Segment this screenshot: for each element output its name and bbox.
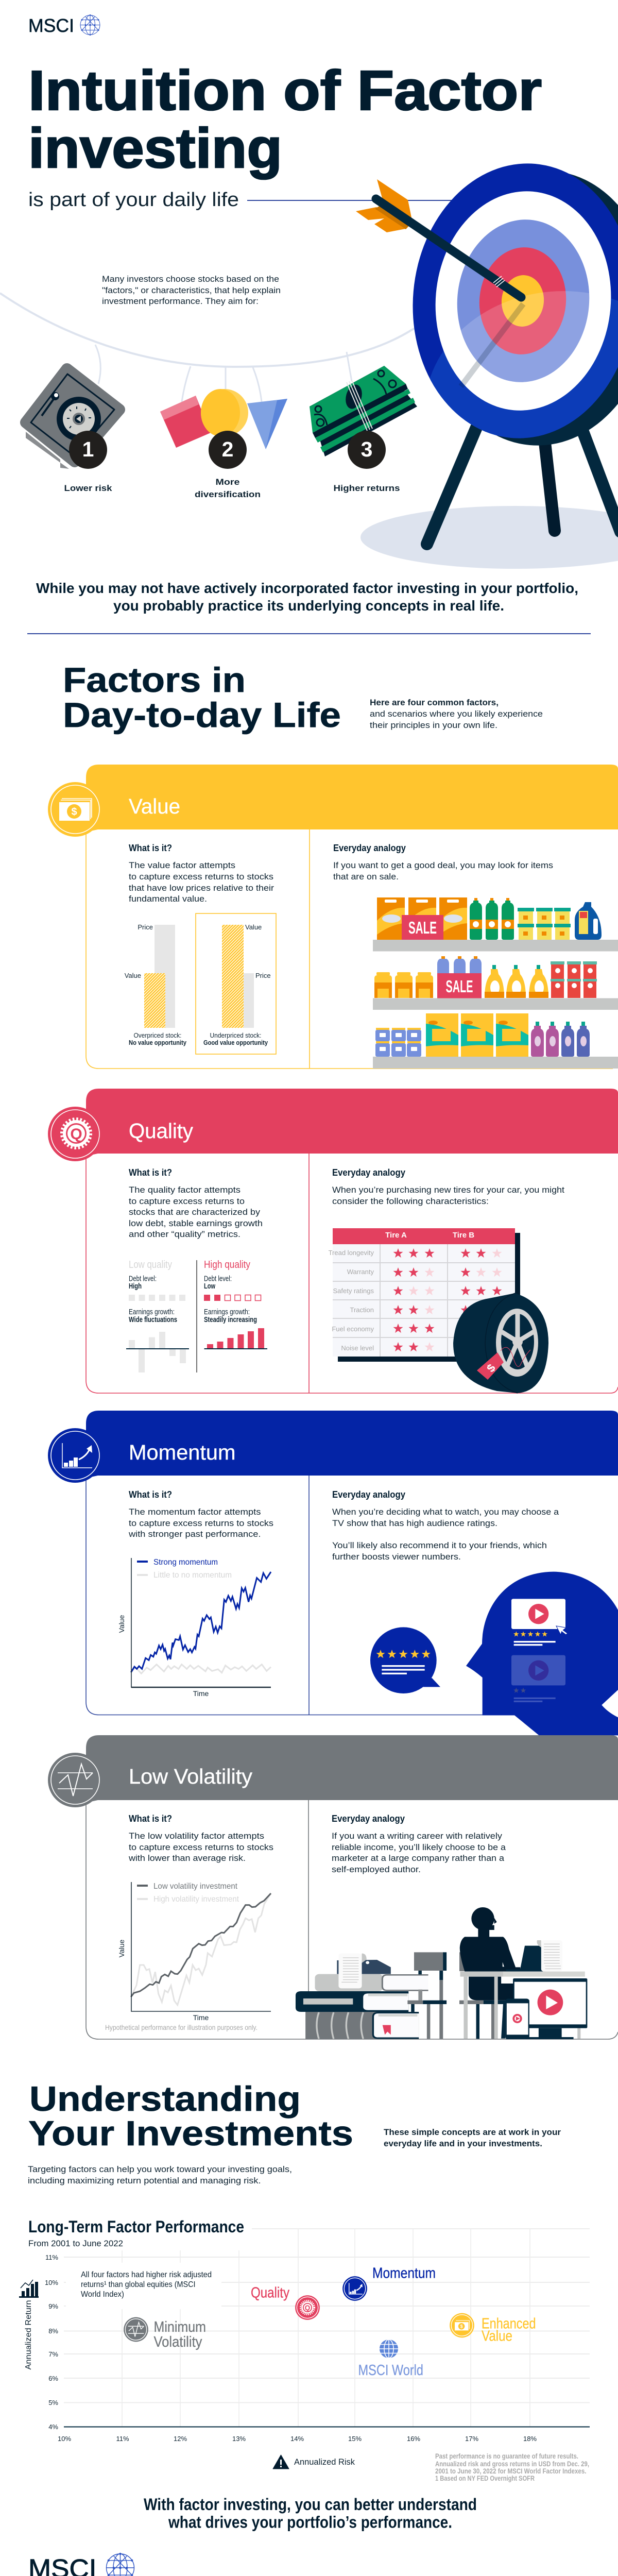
curved string — [0, 284, 507, 402]
momentum everyday analogy: You’ll likely also recommend it to your friends, which — [332, 1540, 547, 1550]
point: momentum: Momentum — [372, 2265, 436, 2281]
intro text — [102, 274, 281, 306]
y axis title: Annualized Return — [24, 2300, 33, 2370]
label: more diversification — [195, 477, 261, 499]
quality what is it — [129, 1167, 263, 1239]
value bar charts: Value — [125, 972, 141, 979]
understanding intro — [28, 2164, 292, 2185]
x axis labels — [58, 2435, 537, 2443]
table: tire comparison: Safety ratings — [333, 1287, 374, 1295]
point: MSCI World: MSCI World — [358, 2362, 423, 2379]
low volatility header — [86, 1735, 618, 1803]
heading: understanding your investments — [28, 2079, 353, 2153]
footnote: 1 Based on NY FED Overnight SOFR — [435, 2474, 535, 2482]
low volatility title: Low Volatility — [129, 1765, 253, 1788]
line chart: low volatility: Value — [117, 1939, 126, 1957]
chart note: All four factors had higher risk adjusted — [81, 2270, 212, 2279]
value what is it — [129, 843, 274, 904]
panel: momentum — [48, 1411, 618, 1735]
momentum what is it: to capture excess returns to stocks — [129, 1518, 273, 1528]
icon: target on tripod — [360, 154, 618, 569]
badge: number 1: 1 — [82, 437, 94, 461]
low volatility what is it: The low volatility factor attempts — [129, 1831, 264, 1841]
value what is it: that have low prices relative to their — [129, 883, 274, 893]
closing statement: With factor investing, you can better understand — [144, 2495, 477, 2514]
table: tire comparison: Tread longevity — [329, 1249, 374, 1257]
momentum everyday analogy: TV show that has high audience ratings. — [332, 1518, 497, 1528]
table: tire comparison: Traction — [350, 1306, 374, 1314]
low volatility icon — [48, 1753, 102, 1807]
low volatility what is it: with lower than average risk. — [128, 1853, 246, 1863]
value bar charts: Value — [245, 923, 262, 931]
point: enhanced value — [450, 2313, 536, 2344]
quality comparison: Debt level: — [129, 1275, 157, 1283]
quality what is it: and other “quality” metrics. — [129, 1229, 241, 1239]
x axis labels: 10% — [58, 2435, 71, 2443]
divider — [27, 633, 591, 634]
statement: While you may not have actively incorporated factor investing in your portfolio, — [36, 580, 578, 596]
low volatility everyday analogy: marketer at a large company rather than a — [332, 1853, 505, 1863]
factors intro text: their principles in your own life. — [370, 720, 497, 730]
y axis labels: 5% — [48, 2399, 58, 2406]
low volatility everyday analogy: Everyday analogy — [332, 1814, 405, 1824]
closing statement — [144, 2495, 477, 2532]
table: tire comparison: Tire B — [453, 1231, 474, 1240]
value everyday analogy — [333, 843, 553, 882]
value everyday analogy: Everyday analogy — [333, 843, 406, 853]
table: tire comparison: Noise level — [341, 1344, 374, 1352]
quality comparison: Earnings growth: — [129, 1308, 175, 1316]
value bar charts: Overpriced stock: — [134, 1031, 181, 1039]
x axis labels: 18% — [523, 2435, 537, 2443]
icon: banknotes — [310, 366, 417, 456]
logo: MSCI footer — [28, 2553, 134, 2576]
heading: understanding your investments: Understanding — [29, 2079, 301, 2119]
x axis labels: 13% — [232, 2435, 246, 2443]
logo: MSCI — [28, 14, 100, 36]
value title: Value — [129, 794, 180, 818]
quality what is it: What is it? — [129, 1167, 172, 1178]
value icon: $ — [71, 806, 77, 818]
quality header — [86, 1089, 618, 1156]
y axis labels — [45, 2253, 58, 2431]
momentum title: Momentum — [129, 1440, 236, 1464]
x axis labels: 17% — [465, 2435, 478, 2443]
label: lower risk: Lower risk — [64, 483, 112, 493]
value bar charts — [125, 913, 276, 1054]
y axis labels: 4% — [48, 2423, 58, 2431]
low volatility everyday analogy: reliable income, you’ll likely choose to be a — [332, 1842, 506, 1852]
quality comparison — [126, 1259, 267, 1372]
icon: safe — [26, 369, 119, 469]
quality comparison: Wide fluctuations — [129, 1315, 177, 1324]
closing statement: what drives your portfolio’s performance. — [168, 2513, 452, 2532]
title — [28, 59, 542, 180]
understanding side note — [384, 2127, 561, 2148]
y axis labels: 11% — [45, 2253, 58, 2261]
point: MSCI World — [358, 2340, 423, 2379]
y axis labels: 9% — [48, 2302, 58, 2310]
point: minimum volatility: Volatility — [153, 2334, 202, 2350]
quality what is it: stocks that are characterized by — [129, 1207, 261, 1217]
momentum what is it: with stronger past performance. — [128, 1529, 261, 1539]
badge: number 2: 2 — [222, 437, 233, 461]
line chart: momentum: Time — [193, 1689, 209, 1698]
line chart: low volatility: High volatility investment — [153, 1895, 239, 1904]
table: tire comparison: Warranty — [347, 1268, 374, 1276]
illustration: speech bubble — [370, 1627, 440, 1693]
footnote: 2001 to June 30, 2022 for MSCI World Factor Indexes. — [435, 2467, 586, 2475]
line chart: momentum: Strong momentum — [153, 1558, 218, 1567]
illustration: grocery shelves — [373, 897, 618, 1069]
icon: diversification shapes — [160, 389, 287, 449]
chart heading: From 2001 to June 2022 — [28, 2239, 123, 2248]
quality comparison: Earnings growth: — [204, 1308, 250, 1316]
point: momentum — [342, 2265, 436, 2301]
statement: you probably practice its underlying concepts in real life. — [113, 598, 504, 614]
x axis labels: 11% — [116, 2435, 129, 2443]
value everyday analogy: If you want to get a good deal, you may look for items — [333, 860, 553, 870]
quality everyday analogy: When you’re purchasing new tires for your car, you might — [332, 1185, 564, 1195]
line chart: momentum: Little to no momentum — [153, 1571, 232, 1580]
momentum everyday analogy: When you’re deciding what to watch, you may choose a — [332, 1507, 559, 1517]
value bar charts: Good value opportunity — [203, 1039, 268, 1046]
factors intro text — [370, 698, 543, 730]
point: enhanced value: Enhanced — [482, 2315, 536, 2332]
point: quality — [251, 2284, 320, 2320]
low volatility what is it — [128, 1814, 273, 1863]
heading: factors in day-to-day life: Day-to-day Life — [63, 696, 341, 735]
quality everyday analogy: consider the following characteristics: — [332, 1196, 489, 1206]
scatter chart: long-term factor performance — [19, 2229, 590, 2469]
point: quality: Q — [305, 2304, 310, 2312]
table: tire comparison: Tire A — [385, 1231, 407, 1240]
point: minimum volatility — [124, 2317, 206, 2350]
quality everyday analogy — [332, 1167, 564, 1206]
value bar charts: Price — [138, 923, 153, 931]
understanding side note: These simple concepts are at work in your — [384, 2127, 561, 2137]
illustration: tire with price tag — [453, 1293, 548, 1393]
momentum header — [86, 1411, 618, 1478]
statement — [36, 580, 578, 614]
value what is it: What is it? — [129, 843, 172, 853]
chart heading: Long-Term Factor Performance — [28, 2217, 244, 2236]
heading: understanding your investments: Your Investments — [28, 2114, 353, 2153]
low volatility what is it: to capture excess returns to stocks — [129, 1842, 273, 1852]
badge: number 3 — [348, 431, 386, 469]
label: more diversification: More — [215, 477, 240, 487]
logo: MSCI: MSCI — [28, 15, 74, 36]
quality title: Quality — [129, 1119, 193, 1143]
icon: arrow — [356, 179, 521, 297]
illustration: grocery shelves: SALE — [408, 918, 437, 937]
y axis labels: 8% — [48, 2327, 58, 2335]
quality icon — [48, 1107, 102, 1161]
quality icon: Q — [70, 1126, 82, 1143]
chart heading — [28, 2217, 244, 2248]
low volatility what is it: What is it? — [129, 1814, 172, 1824]
value what is it: fundamental value. — [129, 894, 207, 904]
heading: factors in day-to-day life: Factors in — [63, 660, 246, 700]
y axis title — [19, 2280, 39, 2370]
title: investing — [28, 117, 282, 180]
momentum everyday analogy: Everyday analogy — [332, 1489, 405, 1500]
momentum everyday analogy — [332, 1489, 559, 1562]
quality comparison: Steadily increasing — [204, 1315, 257, 1324]
footnote — [435, 2452, 589, 2482]
momentum icon — [48, 1428, 102, 1483]
x axis labels: 15% — [348, 2435, 362, 2443]
momentum what is it: The momentum factor attempts — [129, 1507, 261, 1517]
line chart: momentum — [117, 1558, 271, 1698]
y axis labels: 10% — [45, 2279, 58, 2286]
panel: value — [48, 765, 618, 1069]
chart note: World Index) — [81, 2290, 124, 2299]
chart disclaimer: Hypothetical performance for illustration purposes only. — [105, 2023, 258, 2031]
quality everyday analogy: Everyday analogy — [332, 1167, 405, 1178]
line chart: low volatility — [117, 1882, 271, 2022]
factors intro text: Here are four common factors, — [370, 698, 499, 707]
quality comparison: Low — [204, 1282, 215, 1291]
line chart: low volatility: Low volatility investment — [153, 1882, 238, 1891]
label: more diversification: diversification — [195, 489, 261, 499]
value bar charts: Underpriced stock: — [210, 1031, 262, 1039]
badge: number 2 — [209, 431, 247, 469]
low volatility everyday analogy: If you want a writing career with relatively — [332, 1831, 503, 1841]
panel: low volatility — [48, 1735, 618, 2039]
y axis labels: 6% — [48, 2375, 58, 2382]
low volatility everyday analogy — [332, 1814, 506, 1874]
x axis labels: 12% — [174, 2435, 187, 2443]
momentum what is it — [128, 1489, 273, 1539]
momentum everyday analogy: further boosts viewer numbers. — [332, 1552, 461, 1562]
point: quality: Quality — [251, 2284, 289, 2301]
intro text: "factors," or characteristics, that help explain — [102, 285, 281, 295]
value everyday analogy: that are on sale. — [333, 872, 399, 882]
badge: number 1 — [69, 431, 107, 469]
illustration: tire with price tag: $ — [484, 1362, 498, 1375]
y axis labels: 7% — [48, 2350, 58, 2358]
footnote: Past performance is no guarantee of future results. — [435, 2452, 578, 2460]
label: higher returns: Higher returns — [334, 483, 400, 493]
point: enhanced value: Value — [482, 2328, 512, 2344]
title: Intuition of Factor — [28, 59, 542, 122]
value what is it: The value factor attempts — [129, 860, 235, 870]
intro text: investment performance. They aim for: — [102, 296, 259, 306]
understanding intro: including maximizing return potential and managing risk. — [28, 2176, 261, 2185]
quality comparison: Debt level: — [204, 1275, 232, 1283]
quality comparison: Low quality — [129, 1259, 172, 1270]
chart note: returns¹ than global equities (MSCI — [81, 2280, 196, 2289]
quality comparison: High — [129, 1282, 142, 1291]
understanding intro: Targeting factors can help you work toward your investing goals, — [28, 2164, 292, 2174]
chart note — [81, 2270, 212, 2299]
panel: quality — [48, 1089, 618, 1393]
factors intro text: and scenarios where you likely experience — [370, 709, 543, 719]
illustration: grocery shelves: SALE — [446, 977, 473, 996]
x axis labels: 14% — [290, 2435, 304, 2443]
heading: factors in day-to-day life — [63, 660, 341, 735]
understanding side note: everyday life and in your investments. — [384, 2139, 542, 2148]
quality what is it: The quality factor attempts — [129, 1185, 241, 1195]
subtitle: is part of your daily life — [28, 189, 239, 211]
illustration: writer at desk with books — [296, 1907, 587, 2039]
point: enhanced value: $ — [460, 2324, 463, 2329]
badge: number 3: 3 — [361, 437, 372, 461]
table: tire comparison — [329, 1228, 520, 1362]
low volatility everyday analogy: self-employed author. — [332, 1865, 421, 1874]
quality comparison: High quality — [204, 1259, 250, 1270]
line chart: momentum: Value — [117, 1615, 126, 1633]
value icon — [48, 782, 102, 837]
quality what is it: low debt, stable earnings growth — [129, 1218, 263, 1228]
point: minimum volatility: Minimum — [153, 2319, 206, 2335]
x axis title: Annualized Risk — [294, 2457, 355, 2467]
illustration: head with video choices — [466, 1572, 618, 1735]
intro text: Many investors choose stocks based on the — [102, 274, 279, 284]
value bar charts: Price — [255, 972, 271, 979]
value bar charts: No value opportunity — [129, 1039, 187, 1046]
momentum what is it: What is it? — [129, 1489, 172, 1500]
x axis labels: 16% — [407, 2435, 420, 2443]
value header — [86, 765, 618, 832]
value what is it: to capture excess returns to stocks — [129, 872, 273, 882]
line chart: low volatility: Time — [193, 2013, 209, 2022]
x axis title — [273, 2455, 355, 2469]
table: tire comparison: Fuel economy — [332, 1325, 374, 1333]
quality what is it: to capture excess returns to — [129, 1196, 245, 1206]
